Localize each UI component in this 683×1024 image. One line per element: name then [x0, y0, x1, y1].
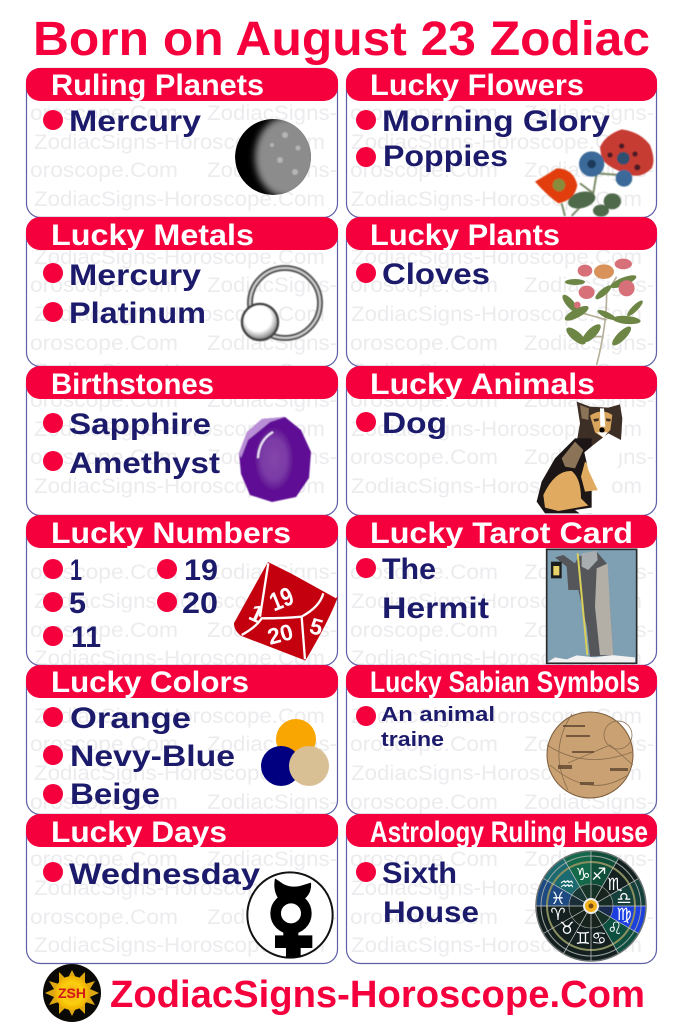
watermark pattern: ZodiacSigns-Horoscope.Com [207, 619, 498, 642]
watermark pattern: oroscope.Com [30, 102, 178, 125]
watermark pattern: oroscope.Com [30, 791, 178, 814]
watermark pattern: oroscope.Com [30, 159, 178, 182]
icon: planet mercury [235, 119, 311, 195]
text: dog: Dog [382, 407, 447, 440]
panel: lucky metals [26, 217, 338, 366]
text: an animal: An animal [381, 704, 495, 726]
watermark pattern: ZodiacSigns-Horoscope.Com [207, 791, 498, 814]
text: number 5: 5 [69, 587, 86, 620]
watermark pattern: oroscope.Com [30, 274, 178, 297]
watermark pattern: ZodiacSigns-Horoscope.Com [207, 733, 498, 756]
watermark pattern: ZodiacSigns-Horoscope.Com [207, 274, 498, 297]
watermark pattern: oroscope.Com [350, 733, 498, 756]
icon: sabian chart [547, 712, 633, 798]
panel: lucky plants [346, 217, 657, 366]
icon: clove plant [560, 259, 645, 365]
watermark pattern: ZodiacSigns-Horoscope.Com [207, 389, 498, 412]
panel: birthstones [26, 366, 338, 516]
watermark pattern: ZodiacSigns-Horoscope.Com [351, 762, 642, 785]
icon: purple gem [239, 417, 311, 502]
icon: red die [235, 563, 337, 659]
icon: zodiac wheel: ♒︎ [559, 875, 575, 895]
watermark pattern: ZodiacSigns-Horoscope.Com [34, 705, 325, 728]
panel: ruling planets [26, 68, 338, 218]
watermark pattern: oroscope.Com [350, 332, 498, 355]
heading: lucky colors: Lucky Colors [51, 666, 249, 699]
icon: zodiac wheel: ♓︎ [550, 889, 566, 909]
panel: lucky days [26, 814, 338, 964]
heading: lucky tarot card: Lucky Tarot Card [370, 517, 633, 550]
watermark pattern: oroscope.Com [350, 389, 498, 412]
watermark pattern: ZodiacSigns-Horoscope.Com [207, 332, 498, 355]
panel: lucky colors [26, 665, 338, 814]
heading: lucky animals: Lucky Animals [370, 368, 595, 401]
text: wednesday: Wednesday [69, 858, 260, 891]
heading: lucky flowers: Lucky Flowers [370, 69, 584, 102]
icon: zodiac wheel: ♋︎ [591, 929, 607, 949]
heading: birthstones: Birthstones [51, 368, 214, 401]
text: cloves: Cloves [382, 258, 490, 291]
text: house: House [383, 896, 479, 929]
watermark pattern: ZodiacSigns-Horoscope.Com [34, 475, 325, 498]
text: poppies: Poppies [383, 140, 508, 173]
icon: zodiac wheel: ♈︎ [550, 905, 566, 925]
icon: metal ring [242, 268, 320, 340]
panel: lucky sabian symbols [346, 665, 657, 814]
watermark pattern: ZodiacSigns-Horoscope.Com [207, 159, 498, 182]
text: amethyst: Amethyst [69, 447, 220, 480]
watermark pattern: oroscope.Com [30, 619, 178, 642]
watermark pattern: ZodiacSigns-Horoscope.Com [207, 906, 498, 929]
watermark pattern: ZodiacSigns-Horoscope.Com [351, 418, 642, 441]
watermark pattern: ZodiacSigns-Horoscope.Com [351, 303, 642, 326]
icon: zodiac wheel: ♎︎ [616, 889, 632, 909]
text: nevy-blue: Nevy-Blue [70, 740, 235, 773]
watermark pattern: ZodiacSigns-Horoscope.Com [34, 246, 325, 269]
footer logo [43, 964, 101, 1022]
watermark pattern: ZodiacSigns-Horoscope.Com [351, 877, 642, 900]
text: number 20: 20 [182, 587, 218, 620]
watermark pattern: ZodiacSigns-Horoscope.Com [34, 590, 325, 613]
heading: lucky metals: Lucky Metals [51, 219, 254, 252]
watermark pattern: ZodiacSigns-Horoscope.Com [351, 475, 642, 498]
panel: lucky flowers [346, 68, 657, 218]
watermark pattern: oroscope.Com [350, 619, 498, 642]
watermark pattern: oroscope.Com [30, 446, 178, 469]
icon: zodiac wheel: ♌︎ [607, 919, 623, 939]
watermark pattern: oroscope.Com [350, 561, 498, 584]
text: number 11: 11 [71, 621, 101, 654]
icon: zodiac wheel: ♉︎ [559, 919, 575, 939]
watermark pattern: oroscope.Com [350, 848, 498, 871]
watermark pattern: ZodiacSigns-Horoscope.Com [351, 131, 642, 154]
icon: red die: 1 [245, 599, 268, 629]
heading: lucky days: Lucky Days [51, 816, 227, 849]
panel: lucky animals [346, 366, 657, 516]
icon: zodiac wheel [536, 851, 646, 961]
watermark pattern: oroscope.Com [30, 389, 178, 412]
watermark pattern: oroscope.Com [30, 906, 178, 929]
title: Born on August 23 Zodiac [33, 13, 650, 66]
watermark pattern: ZodiacSigns-Horoscope.Com [34, 647, 325, 670]
footer logo: ZSH [58, 985, 86, 1001]
text: morning glory: Morning Glory [382, 105, 610, 138]
watermark pattern: ZodiacSigns-Horoscope.Com [207, 848, 498, 871]
icon: hermit tarot card [547, 549, 637, 663]
watermark pattern: ZodiacSigns-Horoscope.Com [351, 934, 642, 957]
heading: lucky numbers: Lucky Numbers [51, 517, 291, 550]
watermark pattern: ZodiacSigns-Horoscope.Com [351, 705, 642, 728]
text: number 1: 1 [70, 554, 82, 587]
watermark pattern: oroscope.Com [30, 561, 178, 584]
text: number 19: 19 [184, 554, 218, 587]
heading: ruling planets: Ruling Planets [51, 69, 264, 102]
watermark pattern: ZodiacSigns-Horoscope.Com [34, 360, 325, 383]
watermark pattern: ZodiacSigns-Horoscope.Com [34, 934, 325, 957]
watermark pattern: ZodiacSigns-Horoscope.Com [351, 360, 642, 383]
watermark pattern: ZodiacSigns-Horoscope.Com [207, 446, 498, 469]
panel: lucky numbers [26, 515, 338, 666]
watermark pattern: ZodiacSigns-Horoscope.Com [34, 762, 325, 785]
watermark pattern: ZodiacSigns-Horoscope.Com [34, 188, 325, 211]
icon: zodiac wheel: ♊︎ [575, 929, 591, 949]
text: sapphire: Sapphire [69, 408, 211, 441]
watermark pattern: oroscope.Com [30, 332, 178, 355]
text: orange: Orange [70, 702, 191, 735]
text: traine: traine [381, 729, 444, 751]
heading: lucky plants: Lucky Plants [370, 219, 560, 252]
watermark pattern: ZodiacSigns-Horoscope.Com [34, 303, 325, 326]
icon: red die: 20 [265, 618, 296, 650]
watermark pattern: oroscope.Com [350, 274, 498, 297]
watermark pattern: ZodiacSigns-Horoscope.Com [34, 418, 325, 441]
text: mercury: Mercury [69, 105, 201, 138]
icon: mercury symbol [247, 872, 333, 958]
watermark pattern: ZodiacSigns-Horoscope.Com [207, 102, 498, 125]
icon: zodiac wheel: ♏︎ [607, 875, 623, 895]
text: sixth: Sixth [382, 857, 457, 890]
icon: colour circles [261, 719, 329, 786]
watermark pattern: ZodiacSigns-Horoscope.Com [34, 877, 325, 900]
text: mercury metal: Mercury [69, 259, 201, 292]
watermark pattern: ZodiacSigns-Horoscope.Com [351, 246, 642, 269]
icon: zodiac wheel: ♑︎ [575, 865, 591, 885]
text: platinum: Platinum [69, 297, 206, 330]
watermark pattern: oroscope.Com [350, 159, 498, 182]
text: hermit: Hermit [382, 592, 489, 625]
watermark pattern [30, 102, 683, 957]
icon: red die: 19 [265, 581, 298, 617]
text: beige: Beige [70, 778, 160, 811]
icon: flowers bouquet [535, 129, 653, 217]
panel: astrology ruling house [346, 814, 657, 964]
icon: zodiac wheel: ♍︎ [616, 905, 632, 925]
watermark pattern: oroscope.Com [350, 446, 498, 469]
icon: zodiac wheel: ♐︎ [591, 865, 607, 885]
icon: red die: 5 [307, 612, 326, 641]
watermark pattern: oroscope.Com [350, 906, 498, 929]
watermark pattern: ZodiacSigns-Horoscope.Com [34, 131, 325, 154]
watermark pattern: ZodiacSigns-Horoscope.Com [207, 561, 498, 584]
watermark pattern: ZodiacSigns-Horoscope.Com [351, 188, 642, 211]
watermark pattern: oroscope.Com [350, 791, 498, 814]
footer website text: ZodiacSigns-Horoscope.Com [110, 974, 645, 1016]
text: the: The [382, 553, 436, 586]
icon: collie dog [537, 402, 622, 514]
watermark pattern: ZodiacSigns-Horoscope.Com [351, 647, 642, 670]
panel: lucky tarot card [346, 515, 657, 666]
watermark pattern: oroscope.Com [350, 102, 498, 125]
watermark pattern: oroscope.Com [30, 733, 178, 756]
watermark pattern: ZodiacSigns-Horoscope.Com [351, 590, 642, 613]
watermark pattern: oroscope.Com [30, 848, 178, 871]
